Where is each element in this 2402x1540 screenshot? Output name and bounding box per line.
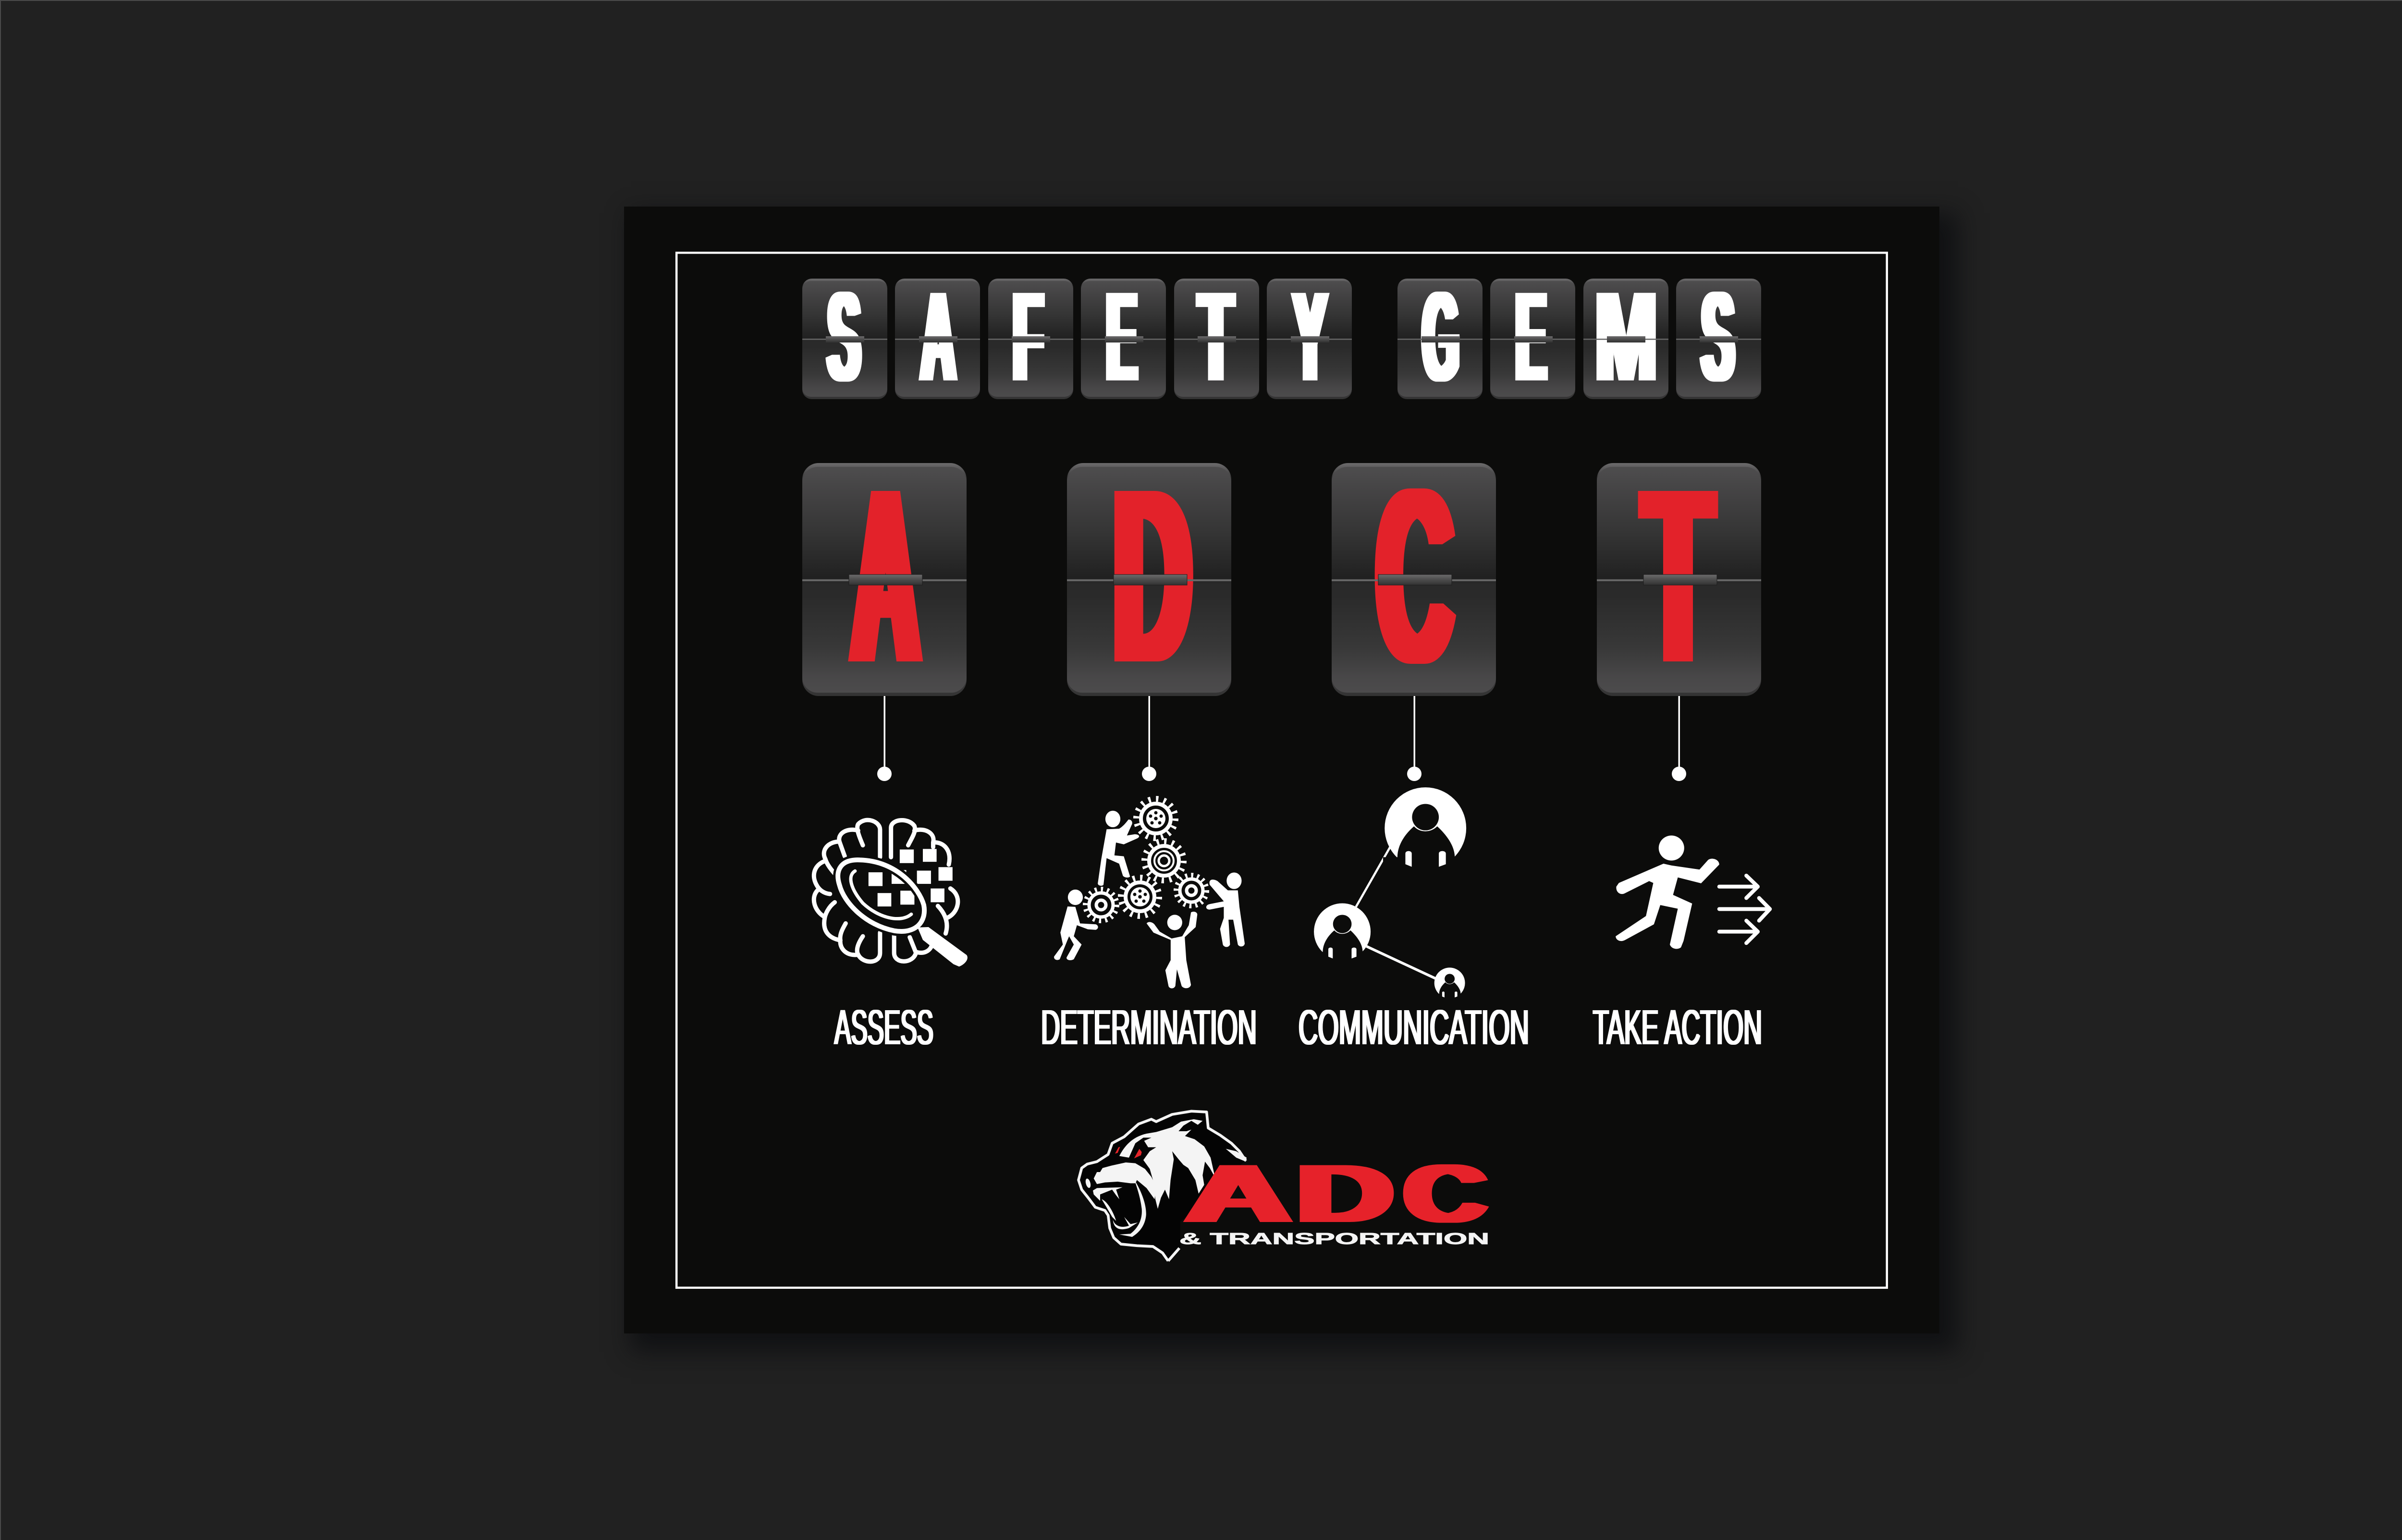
label: COMMUNICATION: COMMUNICATION xyxy=(1299,1000,1529,1055)
gear 5 xyxy=(1085,889,1117,921)
tile: F: F xyxy=(1013,266,1043,408)
tile: S: S xyxy=(828,266,860,408)
tile: S xyxy=(1676,266,1761,408)
person node medium xyxy=(1313,904,1373,962)
connector: D to determination xyxy=(1142,696,1156,781)
gear 3 xyxy=(1121,878,1159,916)
tile: G xyxy=(1397,266,1483,408)
icon: brain with magnifier xyxy=(814,820,968,966)
large tile: A xyxy=(802,438,967,714)
logo wordmark: ADC: A xyxy=(1186,1148,1291,1240)
gear 4 xyxy=(1176,875,1207,906)
icon: running person with arrows xyxy=(1616,835,1770,949)
title: SAFETY GEMS flip tiles xyxy=(802,265,1761,408)
tile: E: E xyxy=(1107,266,1137,408)
tile: S: S xyxy=(1702,266,1734,408)
label: TAKE ACTION: TAKE ACTION xyxy=(1593,1000,1762,1055)
figures xyxy=(1054,811,1245,988)
panel: black poster xyxy=(624,207,1939,1333)
large tile: T: T xyxy=(1643,438,1713,715)
white frame xyxy=(676,253,1887,1288)
large tile: T xyxy=(1597,438,1761,715)
gear 1 xyxy=(1136,799,1176,838)
tile: S xyxy=(802,266,887,408)
icon: people turning gears xyxy=(1054,799,1245,988)
tile: A xyxy=(895,266,980,408)
label: DETERMINATION: DETERMINATION xyxy=(1041,1000,1257,1055)
logo wordmark: & TRANSPORTATION: & TRANSPORTATION xyxy=(1179,1230,1489,1247)
tile: Y: Y xyxy=(1294,265,1326,408)
logo wordmark: ADC xyxy=(1186,1148,1486,1240)
tile: M: M xyxy=(1595,265,1657,407)
tile: T: T xyxy=(1199,266,1233,408)
person node large xyxy=(1383,787,1469,872)
logo wordmark: ADC: C xyxy=(1405,1148,1486,1240)
connector: A to assess xyxy=(877,696,892,781)
person node small xyxy=(1434,967,1466,1000)
tile: T xyxy=(1174,266,1259,408)
large tile: D xyxy=(1067,438,1231,714)
tile: E: E xyxy=(1516,266,1546,408)
connector: C to communication xyxy=(1407,696,1422,781)
icon: communication network xyxy=(1313,787,1469,1000)
logo wordmark: ADC: D xyxy=(1297,1148,1393,1240)
text: ASSESS xyxy=(834,1000,933,1055)
tile: F xyxy=(988,266,1073,408)
logo: ADC & Transportation xyxy=(1078,1111,1489,1261)
large tile: A: A xyxy=(853,438,919,714)
logo mark: snarling head xyxy=(1078,1111,1247,1261)
tile: A: A xyxy=(921,266,955,408)
large tile: D: D xyxy=(1114,438,1191,714)
large tile: C: C xyxy=(1377,437,1452,714)
tile: Y xyxy=(1267,265,1352,408)
tile: G: G xyxy=(1423,266,1458,408)
gear 2 xyxy=(1144,841,1184,880)
large tile: C xyxy=(1332,437,1496,714)
connector: T to take action xyxy=(1672,696,1686,781)
tile: E xyxy=(1490,266,1575,408)
tile: E xyxy=(1081,266,1166,408)
